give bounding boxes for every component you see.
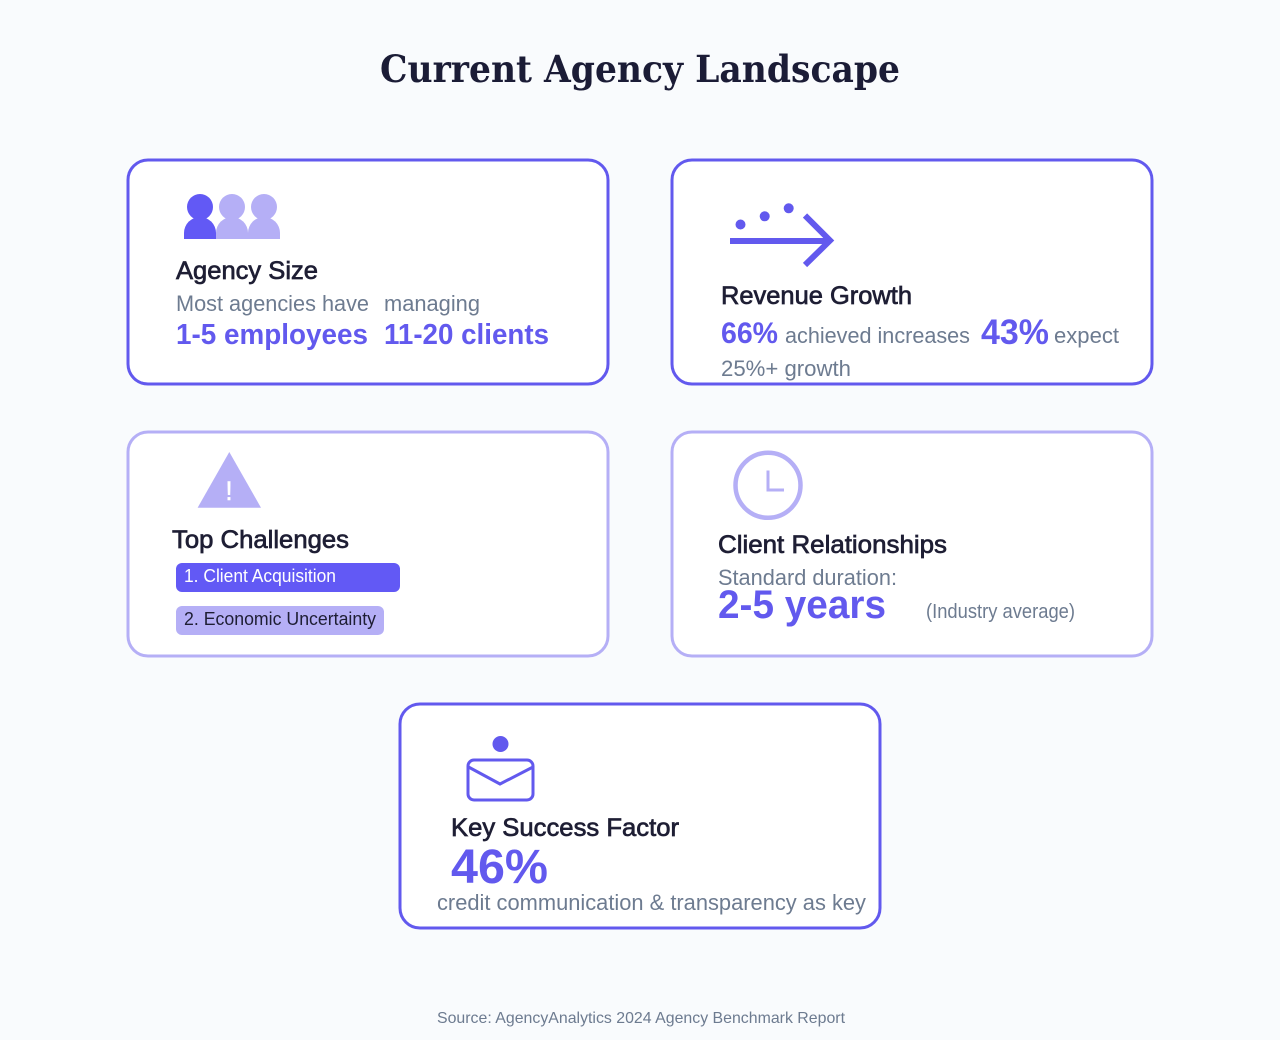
- panel: agency size: [128, 160, 608, 384]
- heading: revenue growth: Revenue Growth: [721, 282, 912, 310]
- panel: client relationships: [672, 432, 1152, 656]
- panel: revenue growth: [672, 160, 1152, 384]
- stat: 1-5 employees: 1-5 employees: [176, 319, 368, 351]
- text: credit communication: credit communication & transparency as key: [437, 890, 866, 915]
- badge: economic uncertainty: [176, 606, 384, 635]
- panel: key success factor: [400, 704, 880, 928]
- heading: key success factor: Key Success Factor: [451, 814, 679, 842]
- panel: top challenges: [128, 432, 608, 656]
- title: Current Agency Landscape: [380, 47, 900, 91]
- stat: 46%: 46%: [451, 841, 548, 894]
- badge: economic uncertainty: 2. Economic Uncertainty: [184, 609, 376, 629]
- text: standard duration: Standard duration:: [718, 565, 897, 590]
- icon: envelope with dot: [468, 736, 533, 800]
- stat: 11-20 clients: 11-20 clients: [384, 319, 549, 351]
- stat: 43%: 43%: [981, 313, 1049, 352]
- text: most agencies have: Most agencies have: [176, 291, 369, 316]
- icon: three people: [184, 194, 280, 239]
- icon: clock: [736, 453, 800, 518]
- heading: client relationships: Client Relationships: [718, 531, 947, 559]
- icon: warning triangle: !: [225, 476, 233, 506]
- badge: client acquisition: [176, 563, 400, 592]
- text: 25%+ growth: 25%+ growth: [721, 356, 851, 381]
- badge: client acquisition: 1. Client Acquisition: [184, 566, 336, 586]
- text: industry average: (Industry average): [926, 601, 1075, 623]
- icon: warning triangle: [198, 452, 261, 508]
- text: managing: managing: [384, 291, 480, 316]
- heading: agency size: Agency Size: [176, 257, 318, 285]
- source note: Source: AgencyAnalytics 2024 Agency Benchmark Report: [437, 1010, 846, 1027]
- stat: 2-5 years: 2-5 years: [718, 583, 886, 627]
- text: expect: expect: [1054, 323, 1119, 348]
- stat: 66%: 66%: [721, 317, 778, 350]
- icon: growth arrow with dots: [730, 203, 830, 265]
- heading: top challenges: Top Challenges: [172, 526, 349, 554]
- text: achieved increases: achieved increases: [785, 323, 970, 348]
